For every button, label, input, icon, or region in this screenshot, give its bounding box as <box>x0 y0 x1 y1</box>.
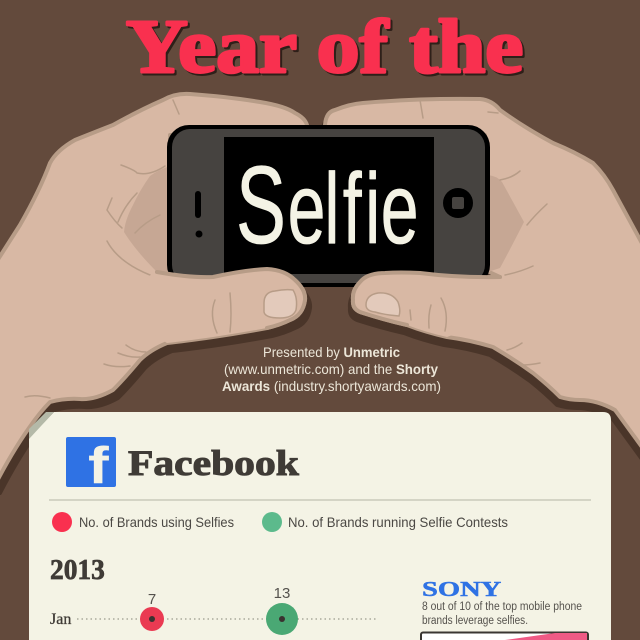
callout: Sony: SONY <box>422 578 501 601</box>
thumbnail <box>264 290 297 318</box>
creases <box>25 100 179 398</box>
presented by text <box>222 344 441 394</box>
screen word: Selfie: S <box>236 144 286 266</box>
callout: Sony: 8 out of 10 of the top mobile phone <box>422 601 582 613</box>
palm shadow <box>124 166 172 272</box>
chart row: Jan: 13 <box>274 585 290 602</box>
callout: Sony: brands leverage selfies. <box>422 615 528 627</box>
thumbnail <box>366 293 400 316</box>
chart row: Jan: 7 <box>148 591 156 608</box>
phone <box>167 125 490 287</box>
year heading: 2013 <box>50 554 105 585</box>
presented by text: (www.unmetric.com) and the Shorty <box>224 361 438 377</box>
hand: right <box>325 99 640 458</box>
presented by text: Awards (industry.shortyawards.com) <box>222 378 441 394</box>
chart row: Jan <box>50 585 376 635</box>
title: Year of the <box>126 5 523 89</box>
legend <box>52 512 508 532</box>
left thumb <box>100 269 305 343</box>
callout: Sony <box>421 578 588 640</box>
hand: left <box>0 94 307 485</box>
icon: facebook logo <box>66 437 116 495</box>
icon: home button <box>443 188 473 218</box>
icon: speaker <box>195 191 202 238</box>
knuckle creases <box>410 298 446 331</box>
panel: facebook <box>29 412 611 640</box>
chart row: Jan: Jan <box>50 611 71 628</box>
right thumb <box>353 272 520 337</box>
palm shadow <box>488 175 524 272</box>
legend: No. of Brands running Selfie Contests <box>288 514 508 530</box>
legend: No. of Brands using Selfies <box>79 514 234 530</box>
heading: Facebook: Facebook <box>128 444 299 483</box>
panel corner fold <box>29 412 54 439</box>
screen word: Selfie: elfie <box>288 154 419 265</box>
creases <box>420 100 547 365</box>
icon: facebook logo: f <box>88 437 110 495</box>
phone screen <box>224 137 434 274</box>
presented by text: Presented by Unmetric <box>263 344 400 360</box>
knuckle creases <box>212 293 231 333</box>
